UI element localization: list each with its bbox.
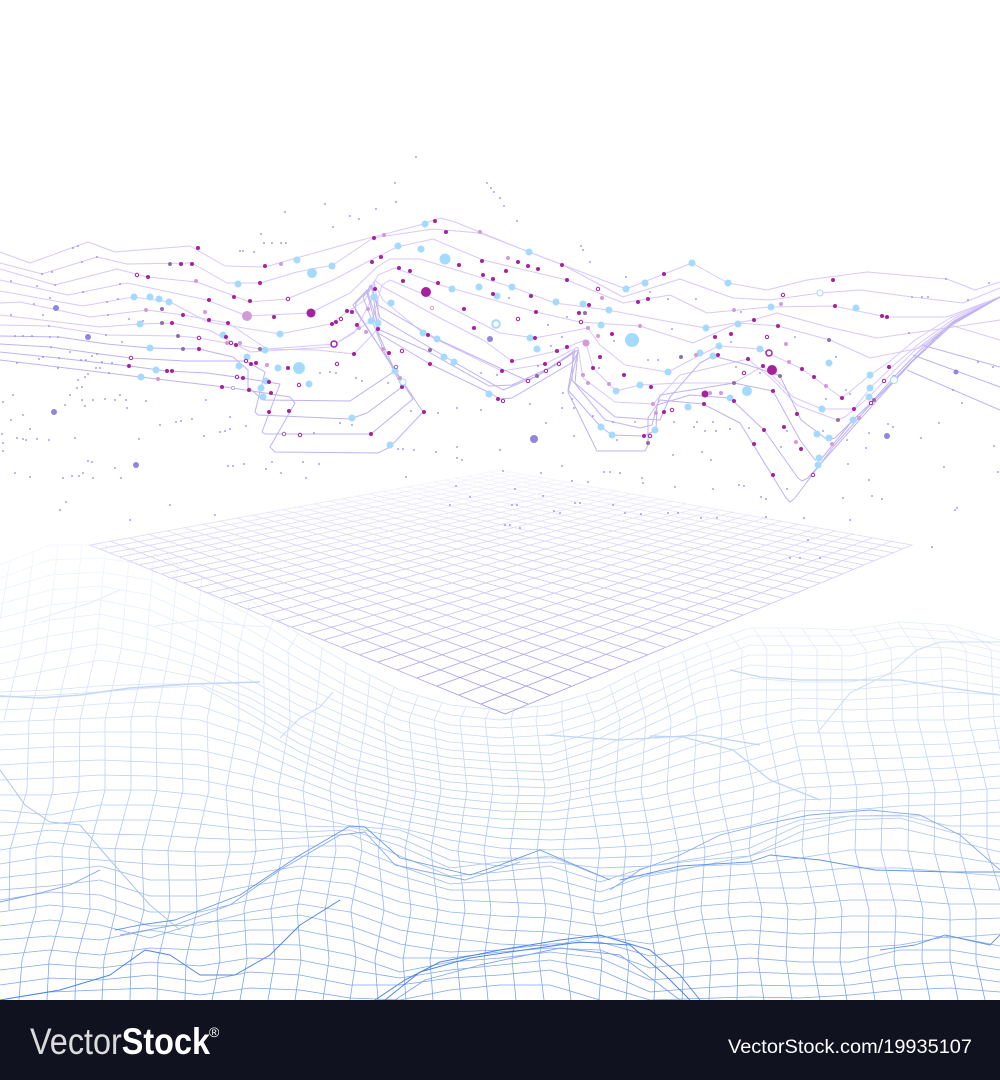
lilac nodes [144,230,896,446]
magenta nodes [127,219,891,477]
perspective grid plane [90,470,912,714]
terrain lower rows [0,805,1000,1000]
deep folded lines [0,285,1000,502]
terrain middle rows [0,702,1000,858]
wave lines with folds [0,218,1000,420]
scattered particles [2,157,998,558]
blue wireframe terrain [0,545,1000,1000]
terrain upper rows [0,545,1000,796]
registered mark: ® [209,1024,220,1040]
large periwinkle dots [51,305,958,468]
logo wordmark: VectorStock [30,1021,210,1062]
image url: VectorStock.com/19935107 [728,1037,972,1058]
grey-purple nodes [160,262,876,445]
terrain columns [0,545,1000,1000]
light blue nodes [130,220,874,468]
ring nodes [129,273,898,477]
terrain ridges [0,590,1000,1000]
footer bar [0,1000,1000,1080]
